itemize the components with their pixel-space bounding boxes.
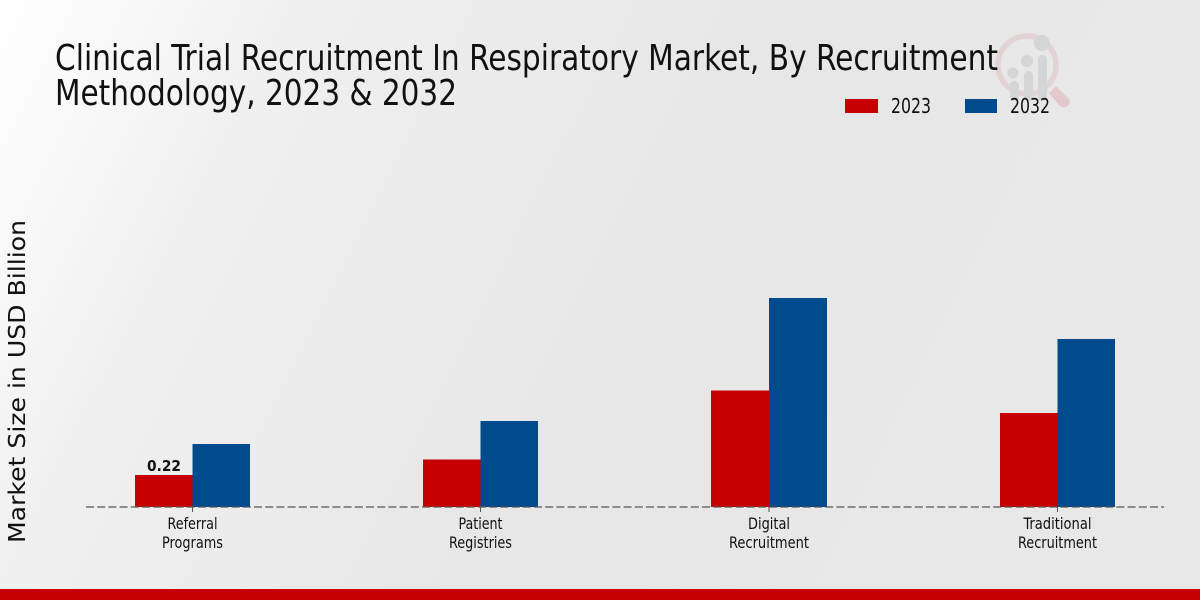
bars: Digital Recruitment xyxy=(711,298,827,507)
title xyxy=(55,38,998,114)
bars: Traditional Recruitment xyxy=(1000,339,1115,507)
bars: Referral Programs xyxy=(135,444,250,507)
legend item: 2023 xyxy=(845,94,931,118)
x-axis label: Referral Programs xyxy=(162,507,223,552)
x-axis label: Patient Registries: Registries xyxy=(449,533,512,552)
x-axis label: Patient Registries: Patient xyxy=(458,514,503,533)
y-axis label: Market Size in USD Billion xyxy=(5,220,31,543)
icon: watermark logo xyxy=(998,35,1070,107)
x-axis baseline xyxy=(86,506,1164,508)
x-axis label: Traditional Recruitment: Traditional xyxy=(1023,514,1092,533)
value label: 0.22: 0.22 xyxy=(147,457,181,475)
x-axis label: Traditional Recruitment: Recruitment xyxy=(1018,533,1097,552)
x-axis label: Traditional Recruitment xyxy=(1018,507,1097,552)
x-axis label: Referral Programs: Programs xyxy=(162,533,223,552)
footer bar xyxy=(0,589,1200,600)
x-axis label: Digital Recruitment xyxy=(729,507,809,552)
legend item: 2023: 2023 xyxy=(891,94,931,118)
legend xyxy=(845,94,1050,118)
legend item: 2032: 2032 xyxy=(1010,94,1050,118)
title: Methodology, 2023 & 2032 xyxy=(55,73,457,114)
x-axis label: Patient Registries xyxy=(449,507,512,552)
x-axis label: Digital Recruitment: Recruitment xyxy=(729,533,809,552)
x-axis label: Referral Programs: Referral xyxy=(168,514,218,533)
bars: Patient Registries xyxy=(423,421,538,507)
x-axis label: Digital Recruitment: Digital xyxy=(748,514,790,533)
title: Clinical Trial Recruitment In Respiratory Market, By Recruitment xyxy=(55,38,998,79)
legend item: 2032 xyxy=(965,94,1050,118)
